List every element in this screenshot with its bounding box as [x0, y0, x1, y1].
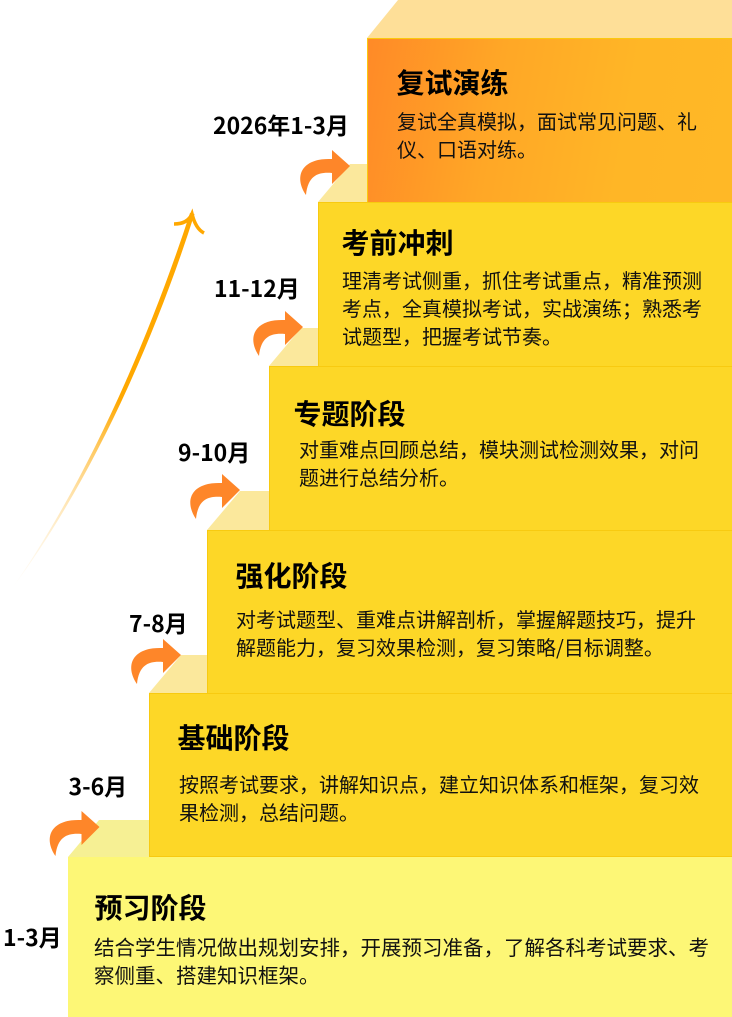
growth arrow [13, 213, 204, 587]
panel: 基础阶段 [149, 693, 732, 857]
panel: 复试演练 [367, 38, 732, 203]
date: 9-10月: 9-10月 [178, 434, 250, 468]
panel: 预习阶段 [68, 857, 732, 1017]
top face: step 3 [207, 491, 269, 530]
panel: 强化阶段 [207, 530, 732, 694]
text: 预习阶段: 察侧重、搭建知识框架。 [94, 959, 320, 989]
text: 基础阶段 [179, 769, 699, 826]
heading: 预习阶段: 预习阶段 [94, 887, 207, 927]
arrow to 基础阶段 [50, 811, 100, 856]
top face: step 6 [367, 0, 732, 38]
text: 复试演练 [397, 106, 697, 163]
heading: 基础阶段: 基础阶段 [178, 717, 290, 757]
text: 专题阶段 [299, 434, 699, 491]
date: 3-6月: 3-6月 [68, 768, 127, 802]
text: 基础阶段: 果检测，总结问题。 [179, 797, 359, 826]
text: 专题阶段: 题进行总结分析。 [299, 462, 459, 491]
top face: step 5 [318, 164, 367, 202]
arrow to 强化阶段 [131, 639, 181, 684]
heading: 专题阶段: 专题阶段 [294, 393, 406, 433]
heading: 复试演练: 复试演练 [396, 62, 509, 102]
panel: 考前冲刺 [318, 202, 732, 367]
text: 考前冲刺: 考点，全真模拟考试，实战演练；熟悉考 [342, 293, 702, 322]
top face: step 2 [149, 655, 207, 693]
text: 预习阶段: 结合学生情况做出规划安排，开展预习准备，了解各科考试要求、考 [94, 931, 709, 961]
date: 1-3月: 1-3月 [3, 919, 62, 953]
text: 考前冲刺: 理清考试侧重，抓住考试重点，精准预测 [342, 265, 702, 294]
text: 强化阶段 [236, 604, 696, 661]
date: 2026年1-3月: 2026年1-3月 [213, 107, 349, 141]
text: 基础阶段: 按照考试要求，讲解知识点，建立知识体系和框架，复习效 [179, 769, 699, 798]
arrow to 复试演练 [300, 150, 350, 195]
top face: step 1 [68, 820, 149, 857]
top face: step 4 [269, 328, 318, 366]
arrow to 专题阶段 [190, 474, 240, 519]
panel: 专题阶段 [269, 366, 732, 531]
text: 考前冲刺: 试题型，把握考试节奏。 [342, 321, 562, 350]
text: 强化阶段: 对考试题型、重难点讲解剖析，掌握解题技巧，提升 [236, 604, 696, 633]
arrow to 考前冲刺 [253, 311, 303, 356]
text: 考前冲刺 [342, 265, 702, 350]
date: 7-8月: 7-8月 [129, 605, 188, 639]
text: 强化阶段: 解题能力，复习效果检测，复习策略/目标调整。 [236, 632, 664, 661]
text: 复试演练: 复试全真模拟，面试常见问题、礼 [397, 106, 697, 135]
text: 专题阶段: 对重难点回顾总结，模块测试检测效果，对问 [299, 434, 699, 463]
text: 复试演练: 仪、口语对练。 [397, 134, 537, 163]
heading: 考前冲刺: 考前冲刺 [342, 222, 454, 262]
date: 11-12月: 11-12月 [214, 270, 300, 304]
text: 预习阶段 [94, 931, 709, 989]
heading: 强化阶段: 强化阶段 [236, 555, 348, 595]
